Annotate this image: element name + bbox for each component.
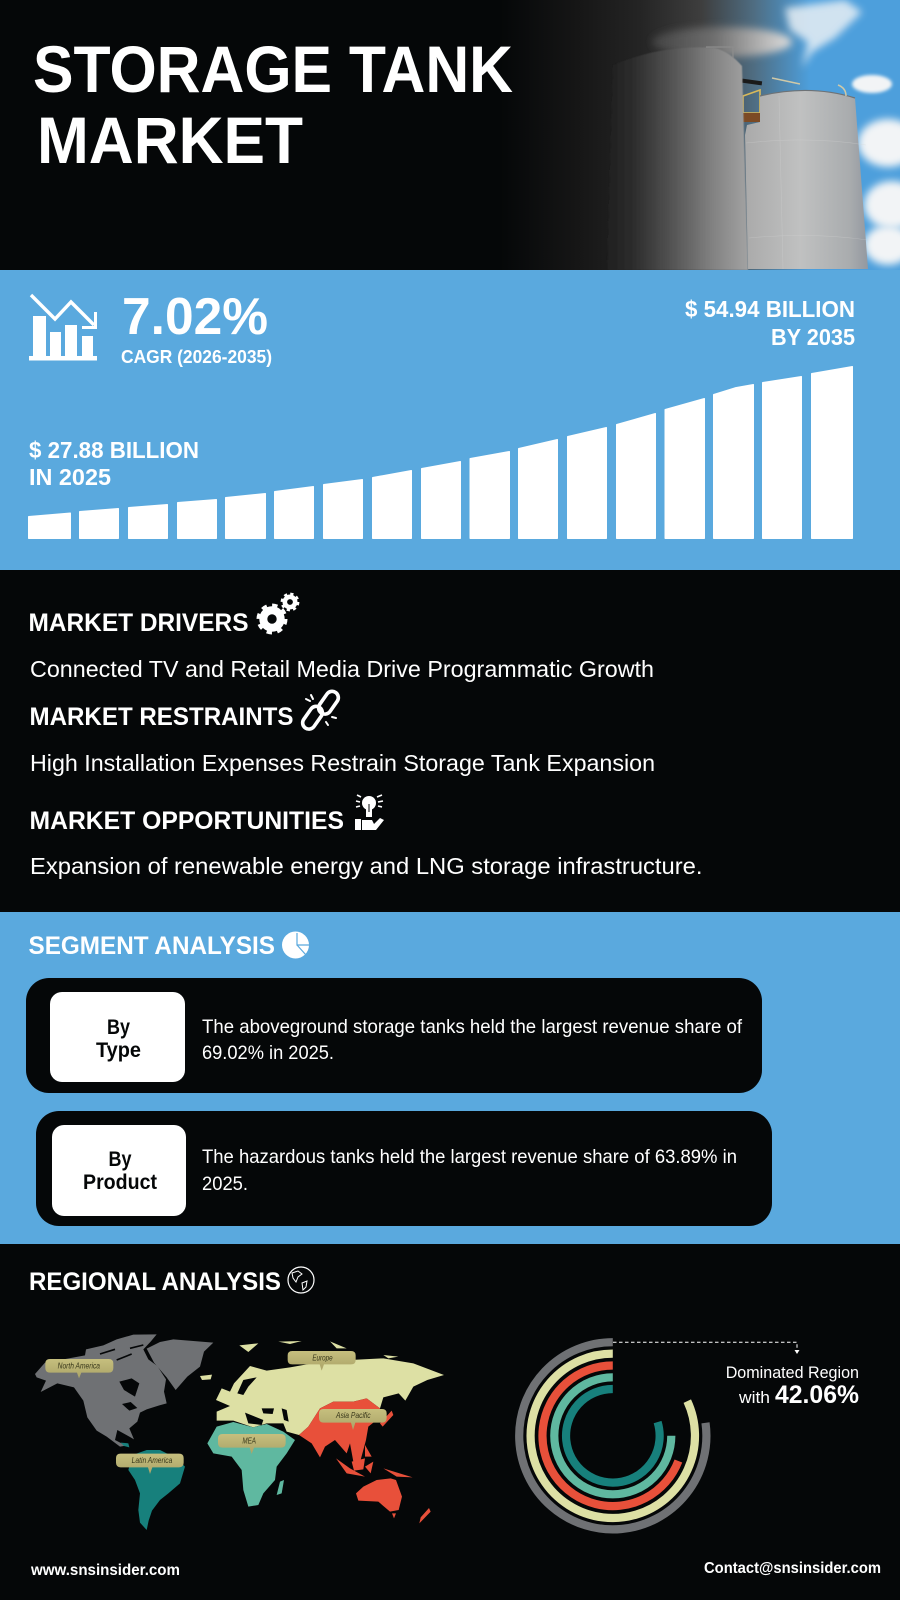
region: Middle East and Africa [207,1422,295,1507]
text: by type finding [202,1016,743,1064]
text: driver: Connected TV and Retail Media Drive Programmatic Growth [30,656,654,682]
label: Latin America: Latin America [132,1456,173,1465]
2035 value label [685,296,855,350]
region: Europe and North Asia [200,1341,444,1435]
icon: light bulb over hand [355,795,384,830]
label: Latin America [116,1454,184,1474]
icon: globe [288,1267,314,1293]
2035 value label: $ 54.94 BILLION [685,296,855,322]
world map [35,1334,444,1530]
radial bar chart: regional share [519,1342,706,1529]
title: MARKET [37,103,303,177]
2025 value label [29,437,199,490]
icon: gears [258,594,298,633]
callout arrow: dashed leader [613,1342,800,1354]
icon: pie chart [282,932,309,958]
text: by product finding: 2025. [202,1173,248,1195]
CAGR value: 7.02% [122,288,268,346]
title [33,32,513,177]
label: Europe: Europe [312,1353,333,1362]
website: www.snsinsider.com [30,1562,180,1579]
panel: segment analysis [0,912,900,1244]
CAGR label: CAGR (2026-2035) [121,346,272,367]
label: Asia Pacific: Asia Pacific [335,1411,371,1420]
2035 value label: BY 2035 [771,324,855,350]
footer [30,1560,881,1579]
icon: bar chart with trend arrow [29,295,97,360]
card: by type [26,978,762,1093]
panel: market size and CAGR [0,270,900,570]
title: STORAGE TANK [33,32,513,106]
panel: regional analysis [29,1267,859,1530]
heading: segment analysis: SEGMENT ANALYSIS [28,932,275,960]
callout: dominated region share: Dominated Region [726,1363,859,1382]
text: opportunity: Expansion of renewable energy and LNG storage infrastructure. [30,853,702,879]
text: by product finding: The hazardous tanks held the largest revenue share of 63.89% in [202,1146,737,1168]
label: Asia Pacific [319,1409,387,1430]
label box: by product: By [108,1148,132,1171]
region: North America [35,1334,213,1447]
label box: by product [52,1125,186,1216]
text: by type finding: 69.02% in 2025. [202,1042,334,1064]
label box: by product: Product [83,1171,157,1194]
heading: market drivers: MARKET DRIVERS [28,609,248,637]
heading: market restraints: MARKET RESTRAINTS [30,703,294,731]
heading: regional analysis: REGIONAL ANALYSIS [29,1268,281,1296]
bar chart: market growth 2025 to 2035 [29,367,852,538]
label: North America [45,1359,113,1378]
heading: market opportunities: MARKET OPPORTUNITIES [30,807,344,835]
label box: by type: By [107,1016,130,1039]
label: MEA: MEA [242,1436,256,1445]
contact email: Contact@snsinsider.com [704,1560,881,1577]
callout: dominated region share: 42.06% [775,1381,859,1409]
label box: by type [50,992,185,1082]
panel: drivers, restraints, opportunities [28,594,702,879]
callout: dominated region share [726,1363,859,1409]
2025 value label: IN 2025 [29,464,111,490]
region: Latin America [121,1443,185,1530]
label: North America: North America [58,1361,100,1370]
icon: broken chain link [300,689,341,732]
2025 value label: $ 27.88 BILLION [29,437,199,463]
region: Asia Pacific [299,1398,431,1523]
card: by product [36,1111,772,1226]
label: Europe [288,1351,356,1371]
text: by type finding: The aboveground storage tanks held the largest revenue share of [202,1016,743,1038]
label box: by type: Type [96,1039,141,1062]
photo: storage tanks against blue sky [500,0,900,270]
text: by product finding [202,1146,737,1195]
text: restraint: High Installation Expenses Restrain Storage Tank Expansion [30,750,655,776]
panel: header [33,0,900,270]
label: MEA [218,1434,286,1454]
callout: dominated region share: with [738,1388,770,1407]
